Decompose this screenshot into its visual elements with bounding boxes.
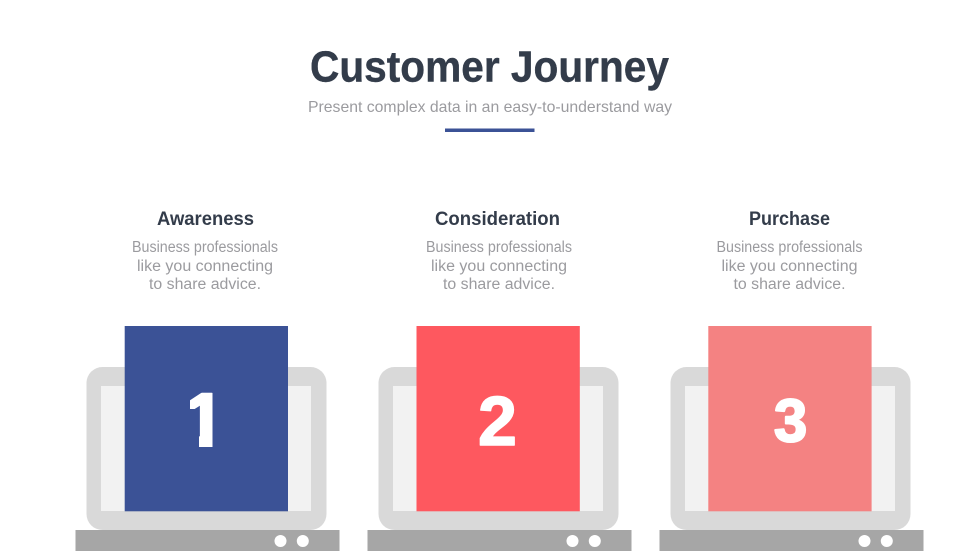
title: Customer Journey — [310, 42, 669, 92]
icon: laptop — [76, 367, 340, 551]
text block: consideration — [426, 239, 572, 293]
text block: awareness: like you connecting — [137, 258, 273, 275]
text block: purchase: to share advice. — [734, 276, 846, 293]
icon: laptop — [660, 367, 924, 551]
heading: awareness: Awareness — [157, 209, 254, 230]
panel: consideration — [368, 209, 632, 551]
title accent line — [445, 128, 534, 132]
text block: consideration: to share advice. — [443, 276, 555, 293]
number 3: 3 — [774, 388, 807, 454]
text block: purchase: like you connecting — [722, 258, 858, 275]
card: step 2 — [416, 326, 580, 511]
heading: purchase: Purchase — [749, 209, 830, 230]
heading: consideration: Consideration — [435, 209, 560, 230]
panel: purchase — [660, 209, 924, 551]
text block: purchase — [716, 239, 863, 293]
text block: awareness — [132, 239, 278, 293]
card: step 3 — [708, 326, 872, 511]
text block: awareness: to share advice. — [149, 276, 261, 293]
panel: awareness — [76, 209, 340, 551]
subtitle: Present complex data in an easy-to-understand way — [308, 99, 672, 116]
text block: consideration: Business professionals — [426, 239, 572, 256]
icon: laptop — [368, 367, 632, 551]
text block: purchase: Business professionals — [716, 239, 863, 256]
text block: awareness: Business professionals — [132, 239, 278, 256]
number 2: 2 — [478, 382, 517, 460]
text block: consideration: like you connecting — [431, 258, 567, 275]
number 1: 1 — [184, 378, 225, 462]
card: step 1 — [125, 326, 288, 511]
